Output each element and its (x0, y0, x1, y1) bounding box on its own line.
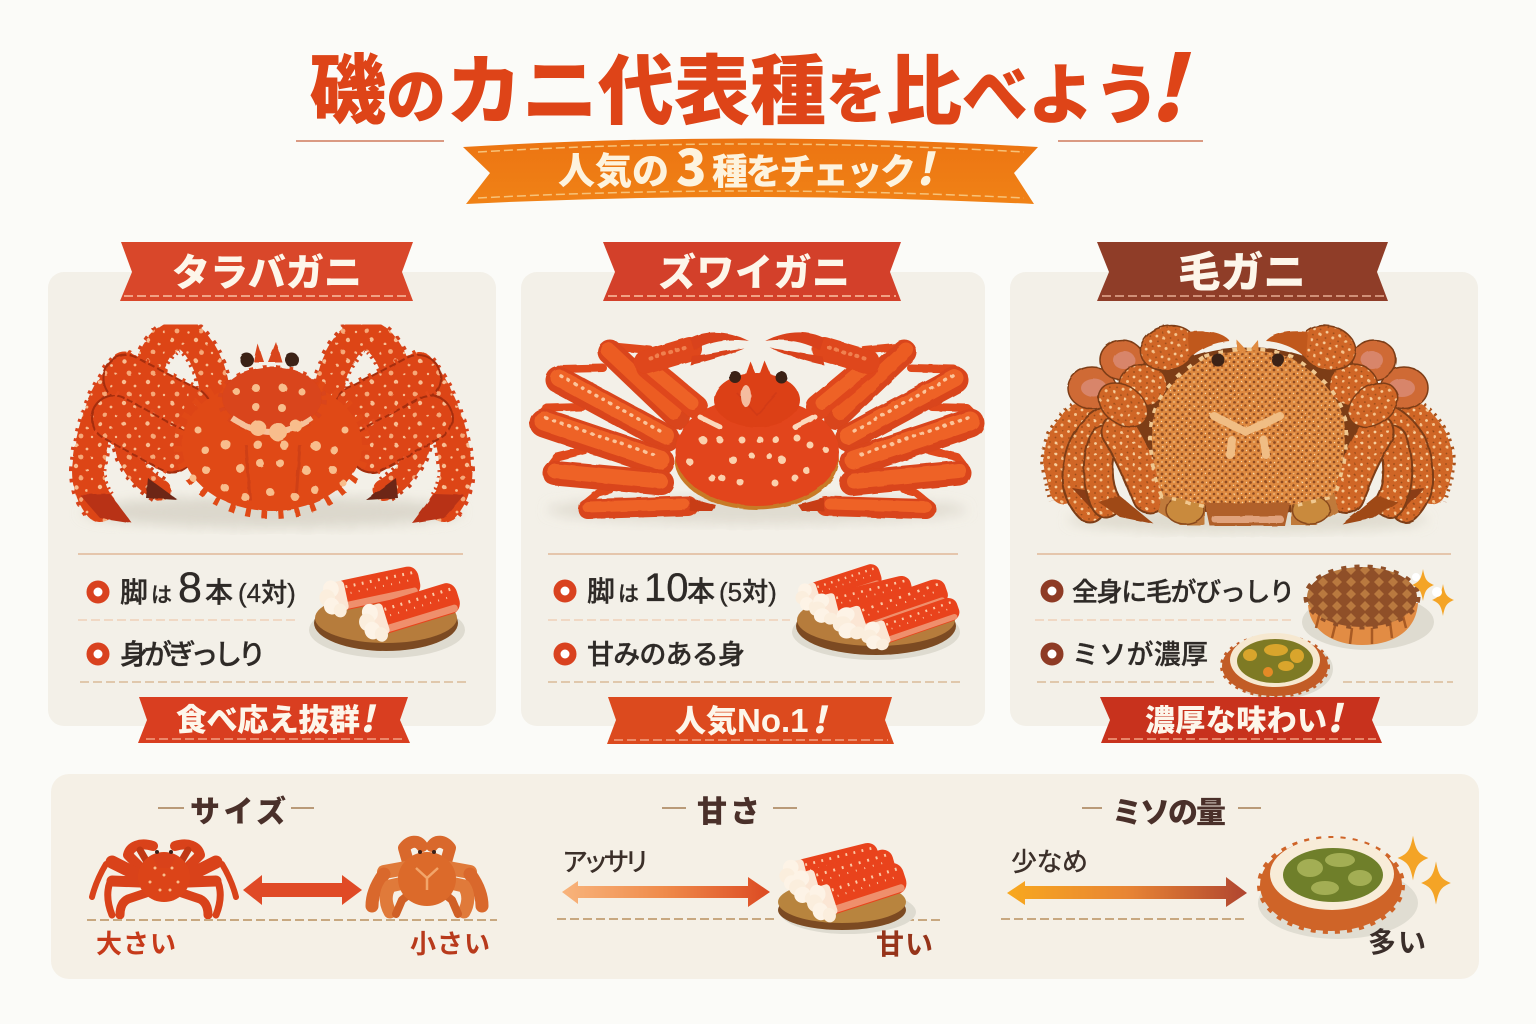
subtitle ribbon (463, 129, 1038, 204)
icon: red crab (92, 844, 236, 915)
arrow: miso (1007, 877, 1247, 907)
label: アッサリ: アッサリ (562, 847, 650, 877)
bullet: legs: (5対) (719, 577, 777, 607)
dish: leg meat (776, 839, 916, 934)
bullet: legs: は (151, 584, 172, 607)
bullet: meat: 身がぎっしり (120, 639, 266, 670)
arrow: size (243, 875, 362, 905)
name banner: ズワイガニ: ズワイガニ (658, 252, 850, 295)
name banner: タラバガニ (120, 242, 413, 301)
bullet: legs: 10 (644, 566, 688, 610)
bullet: hair: 全身に毛がびっしり (1072, 577, 1295, 607)
bullet: legs: 8 (178, 564, 202, 612)
panel: 毛ガニ (1010, 242, 1478, 744)
label: 甘い: 甘い (876, 929, 933, 960)
panel: タラバガニ (48, 242, 496, 743)
name banner: 毛ガニ: 毛ガニ (1178, 249, 1306, 296)
icon: orange crab (372, 842, 482, 914)
panel: ズワイガニ (521, 242, 985, 744)
tag: 人気No.1: ! (810, 692, 835, 744)
subtitle ribbon: 種をチェック (712, 151, 916, 192)
bullet: legs: 脚 (587, 576, 615, 607)
tag: 人気No.1: 人気No.1 (675, 702, 809, 739)
bullet: legs: (4対) (238, 578, 296, 608)
name banner: タラバガニ: タラバガニ (172, 253, 362, 295)
dish: miso in shell (1222, 633, 1333, 699)
name banner: 毛ガニ (1097, 242, 1388, 301)
bullet: sweetness: 甘みのある身 (587, 640, 745, 670)
tag: 食べ応え抜群: 食べ応え抜群 (176, 703, 360, 738)
tag: 濃厚な味わい: ! (1324, 688, 1351, 744)
dish: whole crab shell (1302, 567, 1434, 650)
label: 大さい: 大さい (96, 929, 176, 959)
dish: leg meat on plate (792, 560, 963, 660)
title: 磯のカニ代表種を比べよう (310, 50, 1160, 135)
dish: leg meat on plate (309, 562, 465, 658)
tag: 濃厚な味わい (1100, 688, 1382, 744)
tag: 濃厚な味わい: 濃厚な味わい (1145, 705, 1327, 738)
section: miso amount (1001, 797, 1451, 958)
bullet: legs (90, 564, 296, 612)
heading: サイズ: サイズ (190, 795, 286, 829)
bullet: legs: は (618, 583, 639, 606)
tag: 食べ応え抜群 (138, 691, 410, 743)
panel: comparison strip (51, 774, 1479, 979)
label: 小さい: 小さい (410, 929, 490, 959)
name banner: ズワイガニ (603, 242, 901, 301)
illustration: snow crab (537, 332, 977, 524)
subtitle ribbon: ! (913, 134, 944, 198)
heading: 甘さ (662, 796, 797, 829)
section: sweetness (557, 796, 941, 960)
illustration: king crab (80, 334, 464, 528)
bullet: legs (557, 566, 777, 610)
section: size (87, 795, 497, 959)
tag: 食べ応え抜群: ! (358, 691, 383, 743)
dish: miso shell (1258, 838, 1418, 939)
arrow: sweetness (562, 877, 770, 907)
subtitle ribbon: 人気の (558, 151, 669, 192)
subtitle ribbon: 3 (676, 129, 706, 201)
label: 多い: 多い (1368, 927, 1426, 958)
icon: sparkles (1398, 836, 1451, 905)
title (310, 18, 1210, 148)
tag: 人気No.1 (607, 692, 894, 744)
bullet: legs: 本 (687, 576, 715, 607)
heading: ミソの量: ミソの量 (1112, 797, 1226, 830)
icon: sparkles (1412, 569, 1454, 616)
bullet: legs: 脚 (120, 577, 148, 608)
bullet: miso: ミソが濃厚 (1072, 640, 1208, 670)
title: ! (1141, 18, 1210, 148)
heading: 甘さ: 甘さ (697, 796, 760, 829)
bullet: legs: 本 (205, 577, 233, 608)
illustration: horsehair crab (1057, 320, 1439, 532)
label: 少なめ: 少なめ (1011, 847, 1088, 877)
